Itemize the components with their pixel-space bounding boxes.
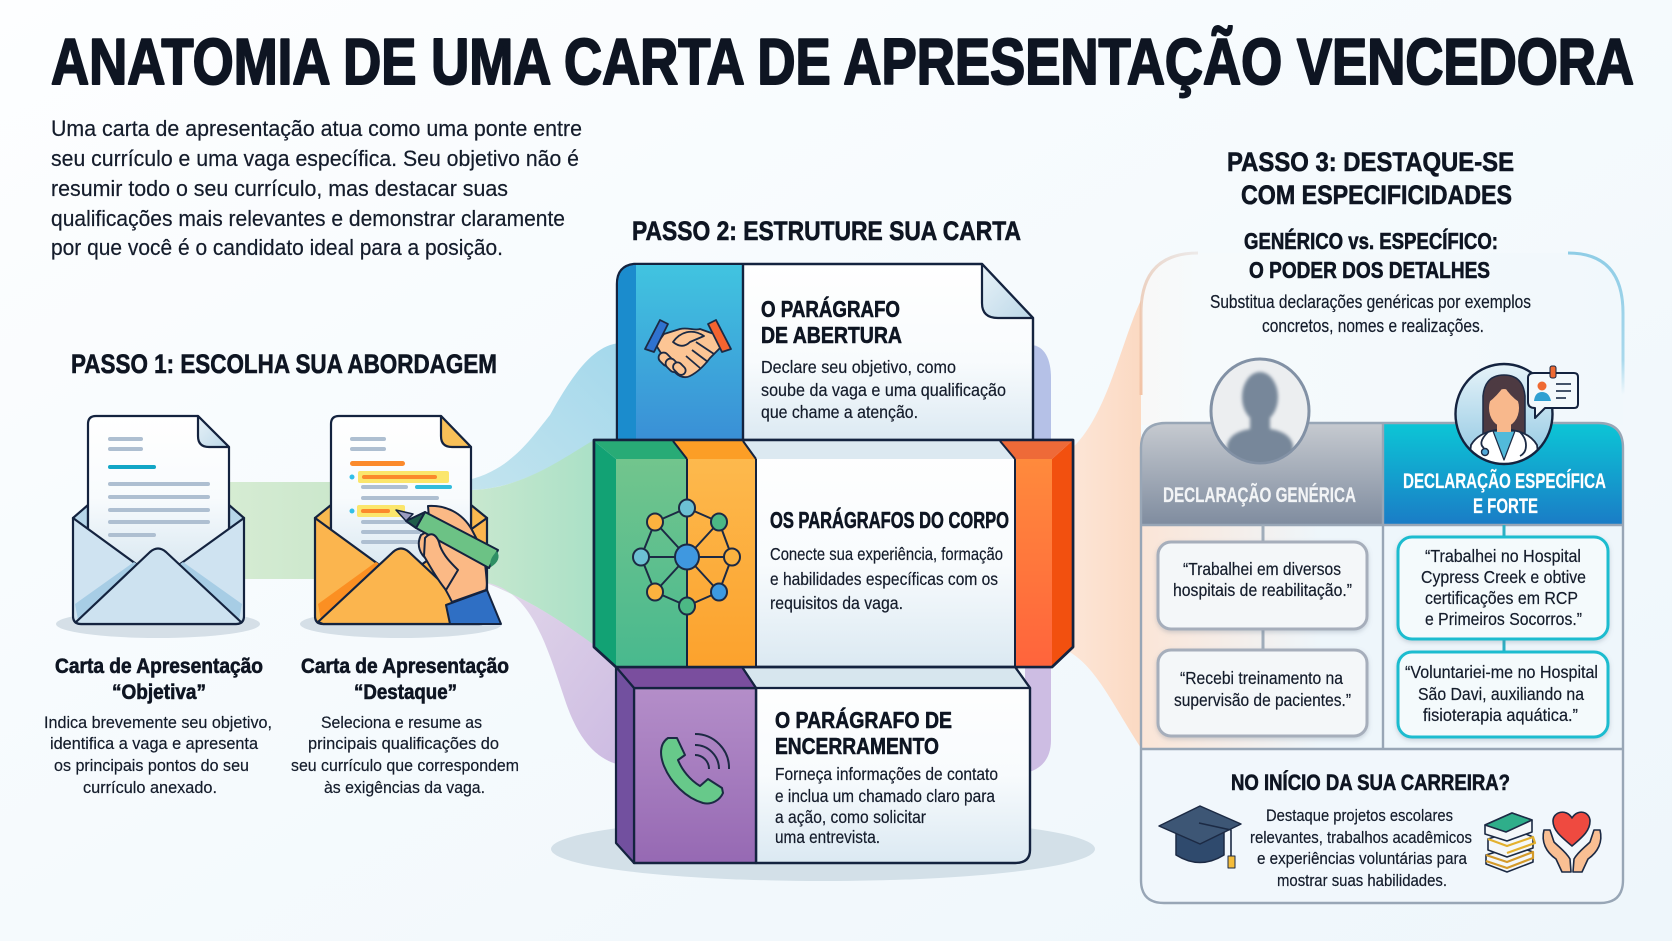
quote: specific 1: Cypress Creek e obtive — [1421, 567, 1586, 587]
quote: generic 1: “Trabalhei em diversos — [1183, 559, 1341, 579]
quote: specific 2 — [1398, 652, 1608, 737]
quote: generic 1: hospitais de reabilitação.” — [1173, 580, 1352, 600]
text: early career: Destaque projetos escolares — [1266, 806, 1453, 825]
objective caption: “Objetiva” — [112, 681, 206, 704]
panel: closing paragraph — [616, 667, 1030, 863]
header: specific: E FORTE — [1473, 495, 1538, 518]
highlight caption: Seleciona e resume as — [321, 713, 482, 732]
header: specific — [1383, 423, 1623, 525]
step 3 heading: COM ESPECIFICIDADES — [1241, 180, 1512, 210]
icon: phone — [661, 734, 729, 803]
intro text: Uma carta de apresentação atua como uma ponte entre — [51, 116, 582, 141]
subheading text: concretos, nomes e realizações. — [1262, 316, 1484, 336]
intro text — [51, 116, 582, 260]
header: generic — [1141, 423, 1383, 525]
icon: highlight envelope with marker — [300, 416, 502, 638]
icon: network — [633, 500, 740, 614]
highlight caption: seu currículo que correspondem — [291, 756, 519, 775]
subheading: generic vs specific: GENÉRICO vs. ESPECÍFICO: — [1244, 227, 1498, 254]
quote: specific 1: “Trabalhei no Hospital — [1425, 546, 1581, 566]
body: closing: e inclua um chamado claro para — [775, 786, 995, 806]
body: closing — [775, 764, 998, 847]
body: opening: soube da vaga e uma qualificação — [761, 380, 1006, 400]
panel: comparison table — [1141, 423, 1623, 903]
body: body paragraphs: e habilidades específicas com os — [770, 569, 998, 589]
quote: specific 2: fisioterapia aquática.” — [1423, 705, 1578, 725]
heading: early career: NO INÍCIO DA SUA CARREIRA? — [1231, 770, 1510, 795]
text: early career — [1250, 806, 1472, 890]
connector bands between steps — [225, 300, 1141, 773]
panel: body paragraphs — [594, 440, 1073, 667]
quote: generic 2 — [1158, 650, 1367, 736]
objective caption — [44, 655, 272, 797]
icon: books — [1485, 813, 1535, 872]
body: body paragraphs: requisitos da vaga. — [770, 593, 903, 613]
heading: closing: O PARÁGRAFO DE — [775, 706, 952, 733]
quote: specific 1 — [1398, 537, 1608, 639]
highlight caption: “Destaque” — [354, 681, 457, 704]
body: closing: uma entrevista. — [775, 827, 880, 847]
heading: opening — [761, 295, 902, 348]
heading: closing: ENCERRAMENTO — [775, 733, 939, 759]
objective caption: identifica a vaga e apresenta — [50, 734, 259, 753]
text: early career: relevantes, trabalhos acadêmicos — [1250, 828, 1472, 847]
body: opening: que chame a atenção. — [761, 402, 918, 422]
objective caption: os principais pontos do seu — [54, 756, 249, 775]
quote: specific 2: São Davi, auxiliando na — [1418, 684, 1584, 704]
objective caption: currículo anexado. — [83, 778, 217, 797]
subheading: generic vs specific: O PODER DOS DETALHES — [1249, 257, 1490, 283]
objective caption: Carta de Apresentação — [55, 655, 263, 678]
highlight caption: principais qualificações do — [308, 734, 499, 753]
panel: specifics background arc — [1141, 253, 1623, 425]
highlight caption — [291, 655, 519, 797]
panel: opening paragraph — [617, 264, 1033, 442]
subheading: generic vs specific — [1244, 227, 1498, 283]
body: closing: Forneça informações de contato — [775, 764, 998, 784]
icon: graduation cap — [1159, 806, 1241, 868]
objective caption: Indica brevemente seu objetivo, — [44, 713, 272, 732]
text: early career: e experiências voluntárias para — [1257, 849, 1467, 868]
text: early career: mostrar suas habilidades. — [1277, 871, 1447, 890]
icon: objective envelope — [56, 416, 260, 638]
icon: handshake — [645, 320, 731, 377]
body: opening: Declare seu objetivo, como — [761, 357, 956, 377]
quote: generic 2: supervisão de pacientes.” — [1174, 690, 1351, 710]
step 3 heading: PASSO 3: DESTAQUE-SE — [1227, 147, 1514, 177]
intro text: por que você é o candidato ideal para a posição. — [51, 235, 503, 260]
heading: body paragraphs: OS PARÁGRAFOS DO CORPO — [770, 506, 1009, 533]
body: closing: a ação, como solicitar — [775, 807, 926, 827]
intro text: qualificações mais relevantes e demonstrar claramente — [51, 206, 565, 231]
header: generic: DECLARAÇÃO GENÉRICA — [1163, 484, 1356, 507]
body: body paragraphs: Conecte sua experiência, formação — [770, 544, 1003, 564]
heading: opening: O PARÁGRAFO — [761, 295, 900, 322]
intro text: resumir todo o seu currículo, mas destacar suas — [51, 176, 508, 201]
icon: generic person — [1211, 359, 1309, 470]
body: opening — [761, 357, 1006, 422]
subheading text — [1210, 292, 1531, 336]
quote: generic 2: “Recebi treinamento na — [1180, 668, 1343, 688]
step 3 heading — [1227, 147, 1514, 210]
quote: specific 2: “Voluntariei-me no Hospital — [1405, 662, 1598, 682]
stack shadow — [551, 817, 1095, 881]
quote: specific 1: certificações em RCP — [1425, 588, 1578, 608]
subheading text: Substitua declarações genéricas por exemplos — [1210, 292, 1531, 312]
icon: hands and heart — [1543, 812, 1601, 872]
intro text: seu currículo e uma vaga específica. Seu objetivo não é — [51, 146, 579, 171]
heading: closing — [775, 706, 952, 759]
heading: opening: DE ABERTURA — [761, 322, 902, 348]
body: body paragraphs — [770, 544, 1003, 613]
icon: doctor — [1456, 364, 1578, 470]
step 1 heading: PASSO 1: ESCOLHA SUA ABORDAGEM — [71, 349, 497, 379]
quote: generic 1 — [1158, 542, 1367, 629]
step 2 heading: PASSO 2: ESTRUTURE SUA CARTA — [632, 216, 1021, 246]
quote: specific 1: e Primeiros Socorros.” — [1425, 609, 1582, 629]
highlight caption: às exigências da vaga. — [324, 778, 485, 797]
highlight caption: Carta de Apresentação — [301, 655, 509, 678]
